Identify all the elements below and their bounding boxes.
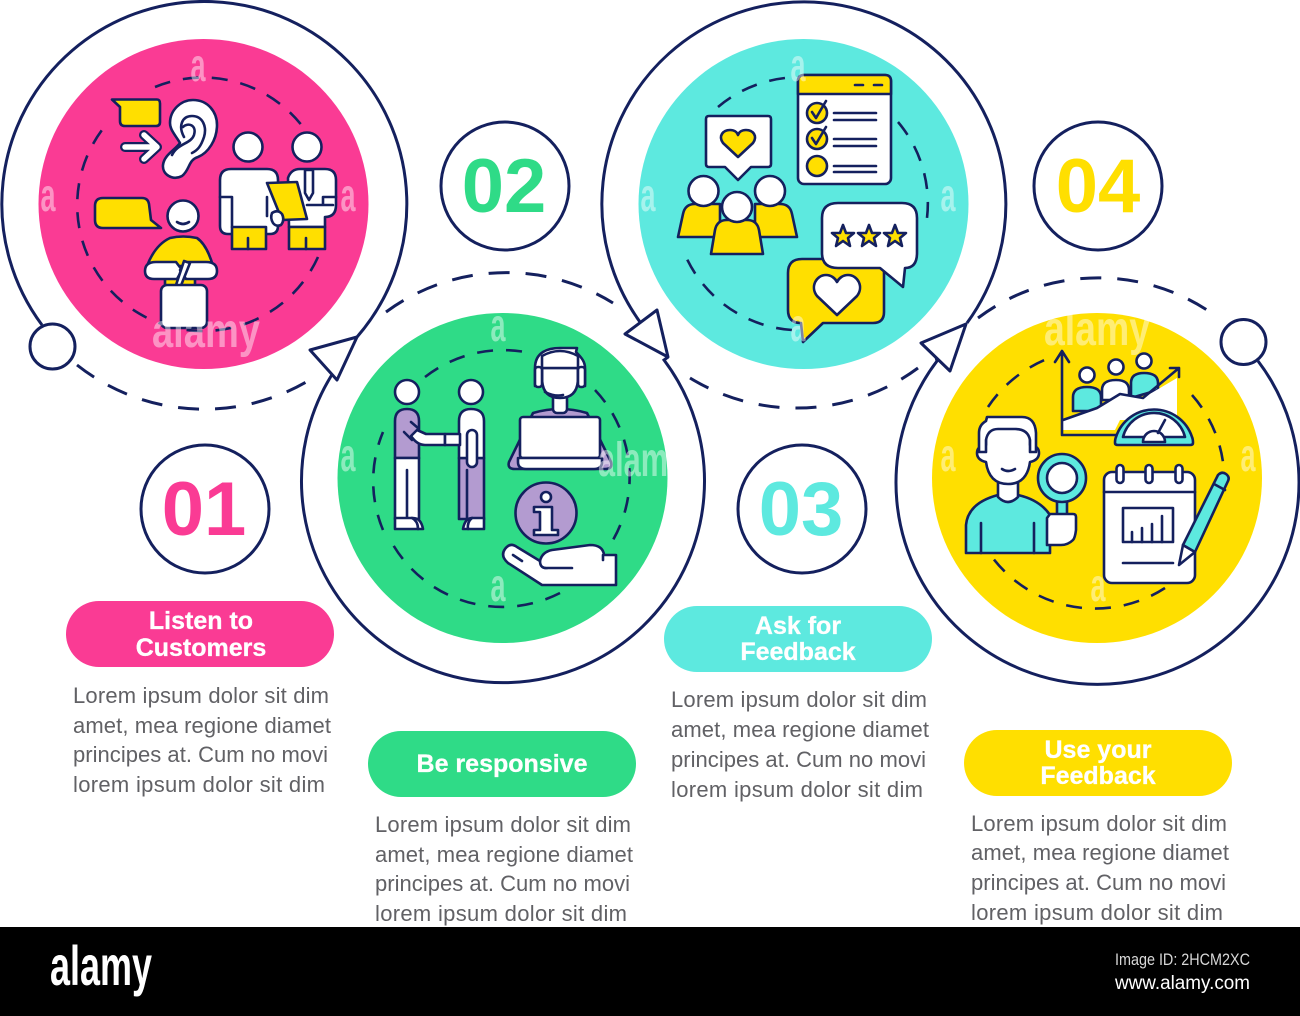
dashed connector: step 2 top <box>386 273 613 312</box>
footer bar <box>0 927 1300 1016</box>
icon: customer speech bubble <box>95 198 161 228</box>
number badge 03: 03 <box>759 467 843 552</box>
text block: step 2: Lorem ipsum dolor sit dim <box>375 812 631 837</box>
number badge 04: 04 <box>1056 144 1140 229</box>
icon: customer group <box>678 176 797 254</box>
icon: star rating bubble <box>822 203 917 287</box>
icon: customer with bag <box>145 200 217 328</box>
icon: calendar report <box>1104 465 1195 583</box>
panel: step 1 circle <box>38 39 368 369</box>
footer logo: alamy <box>50 934 152 997</box>
text block: step 1 <box>73 683 331 797</box>
text block: step 2: lorem ipsum dolor sit dim <box>375 901 627 926</box>
text block: step 4: lorem ipsum dolor sit dim <box>971 900 1223 925</box>
icon: handshake people <box>395 380 484 529</box>
watermarks: step 4: a <box>940 429 956 481</box>
flow ring: step 1 <box>2 1 407 337</box>
dashed connector: step 4 top <box>978 278 1207 318</box>
panel: step 2 circle <box>338 299 668 643</box>
text block: step 2: amet, mea regione diamet <box>375 842 633 867</box>
watermarks: step 2 <box>340 299 668 611</box>
watermarks: step 2: alam <box>598 434 668 487</box>
footer image id: Image ID: 2HCM2XC <box>1115 950 1250 969</box>
dashed connector: step 1 to 2 <box>77 365 316 409</box>
heading pill: Listen to Customers: Listen to <box>149 607 253 635</box>
text block: step 3 <box>671 687 929 802</box>
watermarks: step 1: a <box>40 169 56 221</box>
number badge 03 <box>738 445 866 573</box>
flow ring: step 3 <box>602 2 1006 323</box>
text block: step 4: principes at. Cum no movi <box>971 870 1226 895</box>
text block: step 3: principes at. Cum no movi <box>671 747 926 772</box>
watermarks: step 1 <box>40 39 356 358</box>
icon: incoming speech bubble <box>112 100 160 126</box>
watermarks: step 2: a <box>340 429 356 481</box>
number badge 04 <box>1034 122 1162 250</box>
flow ring: step 4 <box>896 357 1299 684</box>
number badge 01: 01 <box>162 467 246 552</box>
heading pill: Be responsive <box>368 731 636 797</box>
watermarks: step 4 <box>940 303 1256 611</box>
icon: gauge <box>1115 409 1193 445</box>
icon: growth chart with people <box>1055 351 1179 435</box>
text block: step 1: principes at. Cum no movi <box>73 742 328 767</box>
icon: heart bubble above group <box>706 116 771 180</box>
arrow: step 2 to 3 <box>625 310 668 357</box>
text block: step 1: lorem ipsum dolor sit dim <box>73 772 325 797</box>
icon: pencil <box>1179 473 1229 565</box>
icon: open hand <box>503 545 616 585</box>
dashed connector: step 3 bottom <box>690 368 918 408</box>
watermarks: step 4: a <box>1090 559 1106 611</box>
number badge 02: 02 <box>462 144 546 229</box>
heading pill: Listen to Customers <box>66 601 334 667</box>
number badge 02 <box>441 122 569 250</box>
footer url: www.alamy.com <box>1114 973 1250 994</box>
watermarks: step 2: a <box>490 299 506 351</box>
watermarks: step 3: a <box>940 169 956 221</box>
text block: step 3: Lorem ipsum dolor sit dim <box>671 687 927 712</box>
watermarks: step 4: a <box>1240 429 1256 481</box>
watermarks: step 1: a <box>190 39 206 91</box>
text block: step 4: Lorem ipsum dolor sit dim <box>971 811 1227 836</box>
icon: checklist window <box>798 75 891 184</box>
heading pill: Ask for Feedback: Feedback <box>740 638 856 666</box>
text block: step 4: amet, mea regione diamet <box>971 840 1229 865</box>
heading pill: Use your Feedback <box>964 730 1232 796</box>
icon: arrow to ear <box>125 135 157 159</box>
heading pill: Use your Feedback: Use your <box>1045 736 1152 764</box>
flow ring: step 2 <box>302 357 705 683</box>
watermarks: step 3: a <box>790 39 806 91</box>
text block: step 1: amet, mea regione diamet <box>73 713 331 738</box>
heading pill: Ask for Feedback: Ask for <box>755 612 841 640</box>
text block: step 2 <box>375 812 633 926</box>
heading pill: Use your Feedback: Feedback <box>1040 762 1156 790</box>
watermarks: step 3 <box>640 39 956 351</box>
arrow: step 1 to 2 <box>310 337 357 380</box>
panel: step 4 circle <box>932 303 1262 643</box>
start node <box>30 324 75 369</box>
watermarks: step 1: alamy <box>152 305 260 358</box>
text block: step 1: Lorem ipsum dolor sit dim <box>73 683 329 708</box>
icon: two staff members <box>220 132 336 249</box>
icon: white heart <box>814 275 860 315</box>
heading pill: Ask for Feedback <box>664 606 932 672</box>
arrow: step 3 to 4 <box>921 324 966 371</box>
text block: step 3: amet, mea regione diamet <box>671 717 929 742</box>
heading pill: Be responsive: Be responsive <box>416 750 588 778</box>
end node <box>1221 320 1266 364</box>
watermarks: step 1: a <box>340 169 356 221</box>
watermarks: step 3: a <box>640 169 656 221</box>
heading pill: Listen to Customers: Customers <box>136 634 266 662</box>
icon: heart speech bubble <box>788 259 884 342</box>
text block: step 3: lorem ipsum dolor sit dim <box>671 777 923 802</box>
watermarks: step 4: alamy <box>1044 303 1150 356</box>
icon: support agent with laptop <box>509 348 611 469</box>
text block: step 2: principes at. Cum no movi <box>375 871 630 896</box>
number badge 01 <box>141 445 269 573</box>
panel: step 3 circle <box>638 39 968 369</box>
icon: information symbol <box>516 482 576 544</box>
watermarks: step 2: a <box>490 559 506 611</box>
watermarks: step 3: a <box>790 299 806 351</box>
text block: step 4 <box>971 811 1229 925</box>
icon: analyst with magnifier <box>966 417 1086 553</box>
icon: ear <box>163 100 217 178</box>
